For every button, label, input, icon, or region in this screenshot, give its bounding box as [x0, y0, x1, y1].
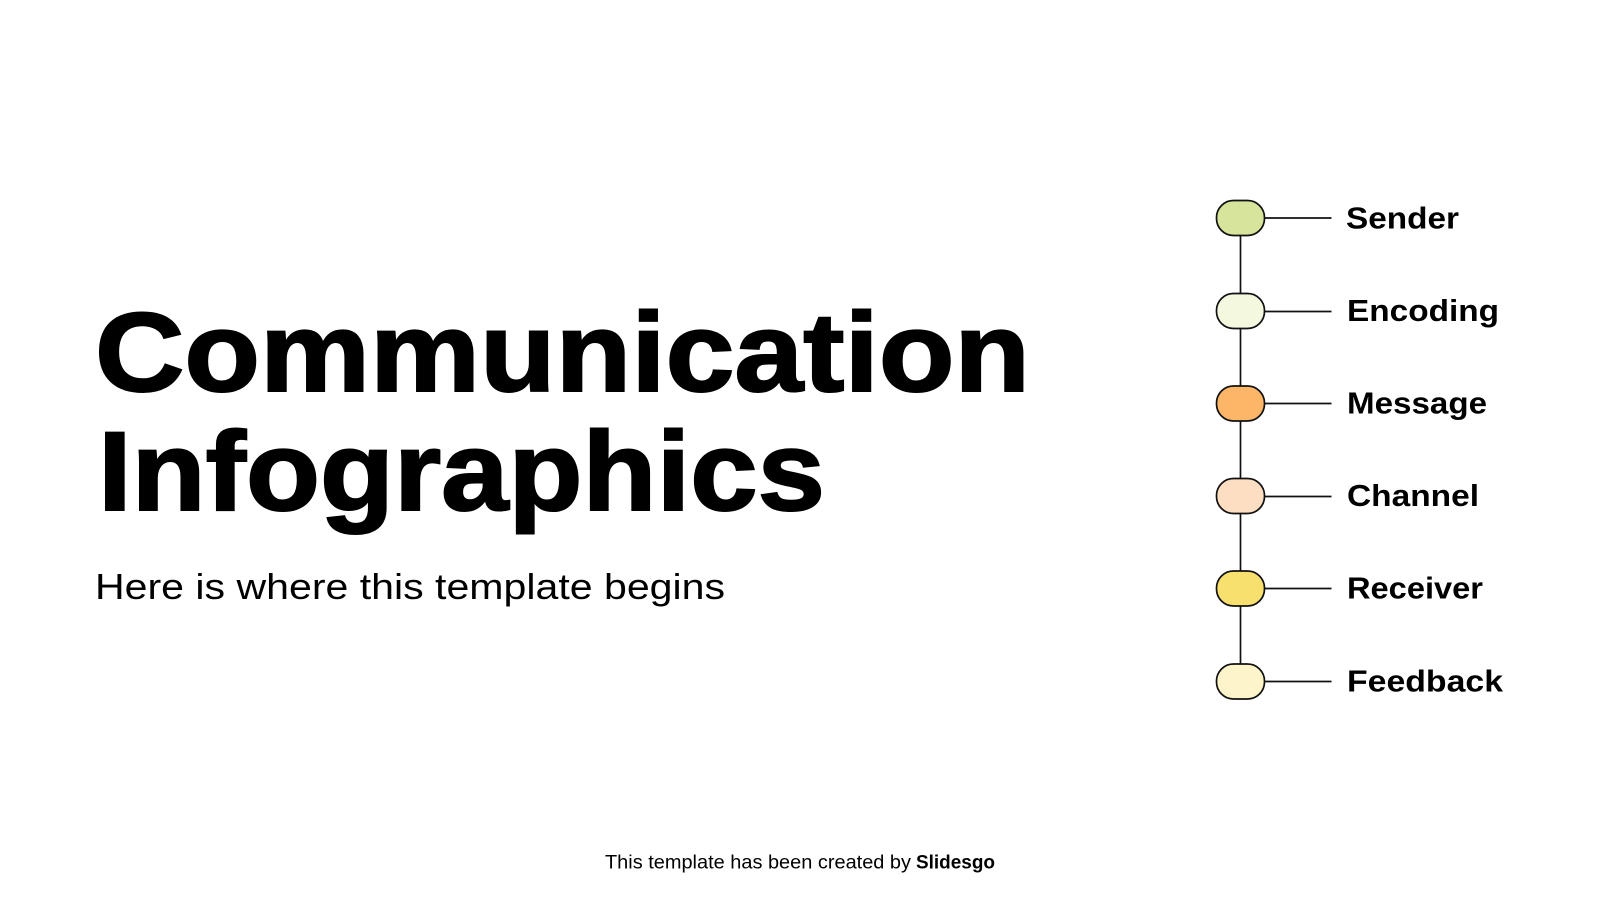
step: Feedback: Feedback: [1347, 664, 1504, 698]
footer credit: This template has been created by: [605, 852, 912, 874]
step: Channel: Channel: [1347, 478, 1479, 513]
flow diagram: communication process: [1216, 200, 1504, 699]
step: Message: [1216, 386, 1487, 421]
step: Encoding: [1216, 293, 1499, 328]
step: Message: Message: [1347, 386, 1487, 420]
title: Communication: [95, 290, 1030, 415]
title: Infographics: [98, 409, 825, 534]
step: Receiver: [1216, 570, 1483, 606]
step: Sender: [1216, 200, 1459, 236]
step: Sender: Sender: [1346, 200, 1459, 236]
footer credit: Slidesgo: [916, 852, 995, 874]
vertical connector line: [1240, 218, 1242, 681]
step: Feedback: [1216, 664, 1504, 699]
step: Encoding: Encoding: [1347, 293, 1499, 328]
title: [95, 290, 1030, 534]
step: Channel: [1216, 478, 1479, 514]
subtitle: Here is where this template begins: [95, 566, 725, 607]
step: Receiver: Receiver: [1347, 570, 1483, 606]
